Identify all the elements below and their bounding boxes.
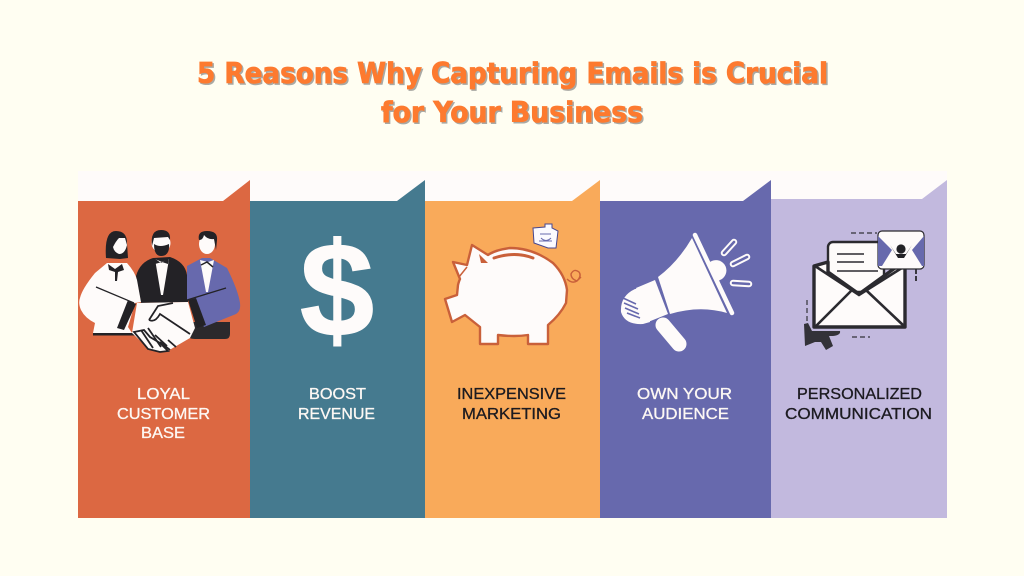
label: INEXPENSIVE bbox=[457, 386, 566, 403]
label bbox=[457, 386, 566, 423]
woman hair and head bbox=[106, 231, 128, 259]
label: CUSTOMER bbox=[117, 406, 210, 423]
right person head bbox=[199, 234, 215, 254]
title: for Your Business bbox=[382, 98, 644, 130]
man torso bbox=[136, 257, 188, 303]
icon: dollar sign: $ bbox=[300, 216, 374, 365]
label bbox=[785, 386, 932, 423]
small profile card bbox=[878, 231, 924, 283]
envelope body bbox=[814, 262, 905, 327]
title bbox=[197, 57, 830, 130]
title: for Your Business bbox=[381, 96, 643, 129]
white top band bbox=[78, 171, 947, 203]
title: 5 Reasons Why Capturing Emails is Crucial bbox=[197, 57, 828, 90]
cuffs bbox=[117, 300, 136, 330]
letter bbox=[828, 242, 884, 292]
label: AUDIENCE bbox=[642, 406, 729, 423]
woman body bbox=[79, 263, 141, 333]
right person body bbox=[187, 258, 240, 327]
panel: loyal customer base bbox=[78, 180, 250, 518]
dark base shape bbox=[804, 323, 840, 350]
label bbox=[117, 386, 210, 442]
panel: personalized communication bbox=[771, 180, 947, 518]
icon: small note bbox=[533, 224, 558, 248]
icon: megaphone bbox=[621, 235, 749, 344]
label: PERSONALIZED bbox=[797, 386, 922, 403]
label bbox=[298, 386, 375, 423]
label bbox=[637, 386, 732, 423]
icon: three people shaking hands bbox=[79, 230, 240, 352]
label: MARKETING bbox=[462, 406, 561, 423]
icon: envelope bbox=[804, 231, 924, 350]
handshake bbox=[132, 302, 195, 352]
panel: inexpensive marketing bbox=[425, 180, 600, 518]
label: LOYAL bbox=[137, 386, 190, 403]
right person trousers bbox=[186, 322, 230, 339]
label: BOOST bbox=[309, 386, 367, 403]
man head bbox=[152, 234, 170, 252]
label: BASE bbox=[141, 425, 185, 442]
title: 5 Reasons Why Capturing Emails is Crucial bbox=[198, 58, 830, 92]
icon: piggy bank bbox=[445, 245, 581, 344]
panel: boost revenue bbox=[250, 180, 425, 518]
label: COMMUNICATION bbox=[785, 406, 932, 423]
panel: own your audience bbox=[600, 180, 771, 518]
label: OWN YOUR bbox=[637, 386, 732, 403]
label: REVENUE bbox=[298, 406, 375, 423]
